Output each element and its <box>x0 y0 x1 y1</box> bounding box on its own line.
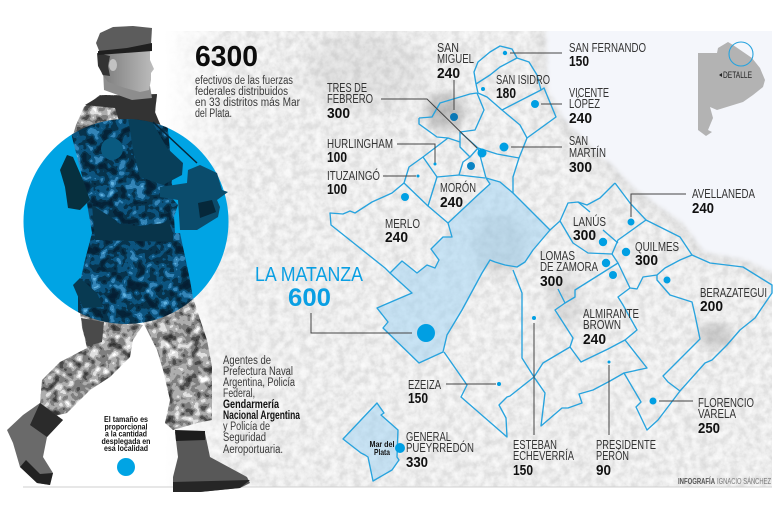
label: Florencio Varela: VARELA <box>698 407 737 421</box>
label: La Matanza: 600 <box>288 284 331 312</box>
label: La Matanza <box>255 264 364 312</box>
label: San Miguel <box>437 41 474 82</box>
headline number: 6300 <box>195 41 258 73</box>
intro text block: federales distribuidos <box>195 86 288 98</box>
label: Lanús: 300 <box>573 227 596 244</box>
legend: proportional dot note: El tamaño es <box>104 414 148 424</box>
label: Morón <box>440 180 476 211</box>
label: San Isidro: SAN ISIDRO <box>496 73 550 87</box>
label: Ituzaingó: ITUZAINGÓ <box>327 168 380 183</box>
label: Hurlingham <box>327 137 393 166</box>
label: Quilmes <box>635 240 679 269</box>
label: Presidente Perón <box>596 438 656 479</box>
soldier: backpack <box>60 155 90 210</box>
label: San Isidro <box>496 73 550 102</box>
soldier: rear boot <box>7 403 63 485</box>
soldier: neck <box>103 70 152 100</box>
label: Avellaneda <box>692 187 756 217</box>
agencies text block: y Policía de <box>223 421 270 433</box>
soldier: torso in blue camo <box>60 119 194 324</box>
legend: proportional dot note: a la cantidad <box>105 428 147 438</box>
label: San Martín: SAN <box>569 134 588 148</box>
soldier: front boot <box>173 430 250 492</box>
label: Vicente López: 240 <box>569 110 592 127</box>
label: Vicente López: VICENTE <box>569 86 609 100</box>
label: Esteban Echeverría: ESTEBAN <box>513 438 557 452</box>
label: Ezeiza: 150 <box>408 390 428 407</box>
label: Quilmes: QUILMES <box>635 240 679 254</box>
label: Almirante Brown: BROWN <box>583 318 621 332</box>
label: Lomas de Zamora: LOMAS <box>540 249 575 263</box>
soldier: strap <box>153 122 197 163</box>
soldier: beret <box>96 26 152 55</box>
label: Morón: MORÓN <box>440 180 476 195</box>
label: Lanús: LANÚS <box>573 214 606 229</box>
label: Almirante Brown: 240 <box>583 331 606 348</box>
soldier: shoulder patch <box>101 138 123 160</box>
label: General Pueyrredón: 330 <box>406 454 428 471</box>
agencies text block: Seguridad <box>223 432 266 444</box>
label: Lanús <box>573 214 606 244</box>
label: Tres de Febrero: 300 <box>327 105 350 122</box>
label: Berazategui <box>700 286 767 315</box>
map: General Pueyrredón district <box>343 403 399 481</box>
label: Florencio Varela: 250 <box>698 420 720 437</box>
soldier: thigh holster strap <box>81 318 104 346</box>
label: Almirante Brown <box>583 307 639 348</box>
label: Vicente López <box>569 86 609 127</box>
label: San Isidro: 180 <box>496 85 516 102</box>
label: Esteban Echeverría: ECHEVERRÍA <box>513 448 574 463</box>
label: Lomas de Zamora: 300 <box>540 273 563 290</box>
label: Avellaneda: 240 <box>692 200 714 217</box>
credit: INFOGRAFÍA <box>678 477 715 486</box>
label: Merlo: 240 <box>385 229 408 246</box>
agencies text block: Agentes de <box>223 355 271 367</box>
label: Florencio Varela <box>698 396 754 437</box>
panel: satellite map background <box>165 20 783 487</box>
label: Merlo: MERLO <box>385 217 420 231</box>
soldier: vest lower <box>92 205 173 242</box>
blue circle behind soldier <box>24 119 228 324</box>
soldier: rifle <box>160 165 228 230</box>
agencies text block: Prefectura Naval <box>223 366 293 378</box>
label: San Miguel: SAN <box>437 41 459 55</box>
intro text block: efectivos de las fuerzas <box>195 75 293 87</box>
label: Presidente Perón: 90 <box>596 462 611 479</box>
label: Lomas de Zamora: DE ZAMORA <box>540 260 599 274</box>
soldier: holster <box>73 278 103 308</box>
label: Tres de Febrero: TRES DE <box>327 81 367 95</box>
agencies text block: Federal, <box>223 388 255 400</box>
label: San Fernando: SAN FERNANDO <box>569 41 646 55</box>
label: Quilmes: 300 <box>635 252 658 269</box>
map: proportional dots <box>395 51 670 453</box>
label: General Pueyrredón: GENERAL <box>406 430 451 444</box>
legend: proportional dot note: desplegada en <box>102 436 150 446</box>
map: La Matanza highlighted district <box>377 178 550 363</box>
label: Florencio Varela: FLORENCIO <box>698 396 754 410</box>
label: Presidente Perón: PERÓN <box>596 448 629 463</box>
soldier: front leg <box>143 298 212 430</box>
soldier: gray shoulder and collar <box>73 95 162 140</box>
label: Ituzaingó <box>327 168 380 198</box>
label: San Martín <box>569 134 606 176</box>
label: Almirante Brown: ALMIRANTE <box>583 307 639 321</box>
label: Ezeiza <box>408 378 441 407</box>
intro text block: del Plata. <box>195 108 232 120</box>
credit <box>678 477 771 486</box>
label: Mar del Plata: Plata <box>374 447 390 457</box>
label: Mar del Plata <box>370 439 394 457</box>
label: Presidente Perón: PRESIDENTE <box>596 438 656 452</box>
inset map: Buenos Aires province <box>698 42 765 136</box>
label: Hurlingham: HURLINGHAM <box>327 137 393 151</box>
label: Vicente López: LÓPEZ <box>569 96 600 111</box>
agencies text block: Gendarmería <box>223 399 279 411</box>
legend: proportional dot note: proporcional <box>104 422 148 432</box>
label: General Pueyrredón: PUEYRREDÓN <box>406 440 474 455</box>
label: Mar del Plata: Mar del <box>370 439 394 449</box>
label: Ituzaingó: 100 <box>327 181 347 198</box>
label: Hurlingham: 100 <box>327 149 347 166</box>
soldier: rear leg <box>40 312 143 417</box>
label: Lomas de Zamora <box>540 249 599 290</box>
intro text block <box>195 75 300 120</box>
label: San Fernando: 150 <box>569 53 589 70</box>
label: Avellaneda: AVELLANEDA <box>692 187 756 201</box>
soldier: ear <box>109 59 117 71</box>
soldier illustration <box>7 26 250 492</box>
map: district boundaries <box>330 46 772 437</box>
label: Merlo <box>385 217 420 246</box>
agencies text block <box>223 355 300 456</box>
label: Tres de Febrero <box>327 81 373 122</box>
agencies text block: Nacional Argentina <box>223 410 300 422</box>
label: Morón: 240 <box>440 194 463 211</box>
label: San Fernando <box>569 41 646 70</box>
agencies text block: Aeroportuaria. <box>223 444 283 456</box>
agencies text block: Argentina, Policía <box>223 377 295 389</box>
label: Esteban Echeverría <box>513 438 574 479</box>
label: Tres de Febrero: FEBRERO <box>327 92 373 106</box>
label: San Miguel: MIGUEL <box>437 52 474 66</box>
legend: proportional dot note: esa localidad <box>104 443 148 453</box>
label: San Martín: MARTÍN <box>569 145 606 160</box>
soldier: face <box>98 48 154 92</box>
label: Esteban Echeverría: 150 <box>513 462 533 479</box>
soldier: forearm <box>116 199 178 226</box>
intro text block: en 33 distritos más Mar <box>195 97 300 109</box>
label: San Martín: 300 <box>569 159 592 176</box>
label: Ezeiza: EZEIZA <box>408 378 441 392</box>
map: leader lines <box>311 53 693 435</box>
soldier: hair <box>97 53 110 76</box>
label: General Pueyrredón <box>406 430 474 471</box>
label: Berazategui: 200 <box>700 298 723 315</box>
label: San Miguel: 240 <box>437 65 460 82</box>
legend: proportional dot note <box>102 414 150 476</box>
ground line <box>23 486 772 488</box>
inset map: Buenos Aires province: DETALLE <box>723 70 752 80</box>
soldier: chest harness <box>85 94 160 124</box>
label: La Matanza: LA MATANZA <box>255 264 364 286</box>
soldier: chest pouch <box>128 118 183 185</box>
